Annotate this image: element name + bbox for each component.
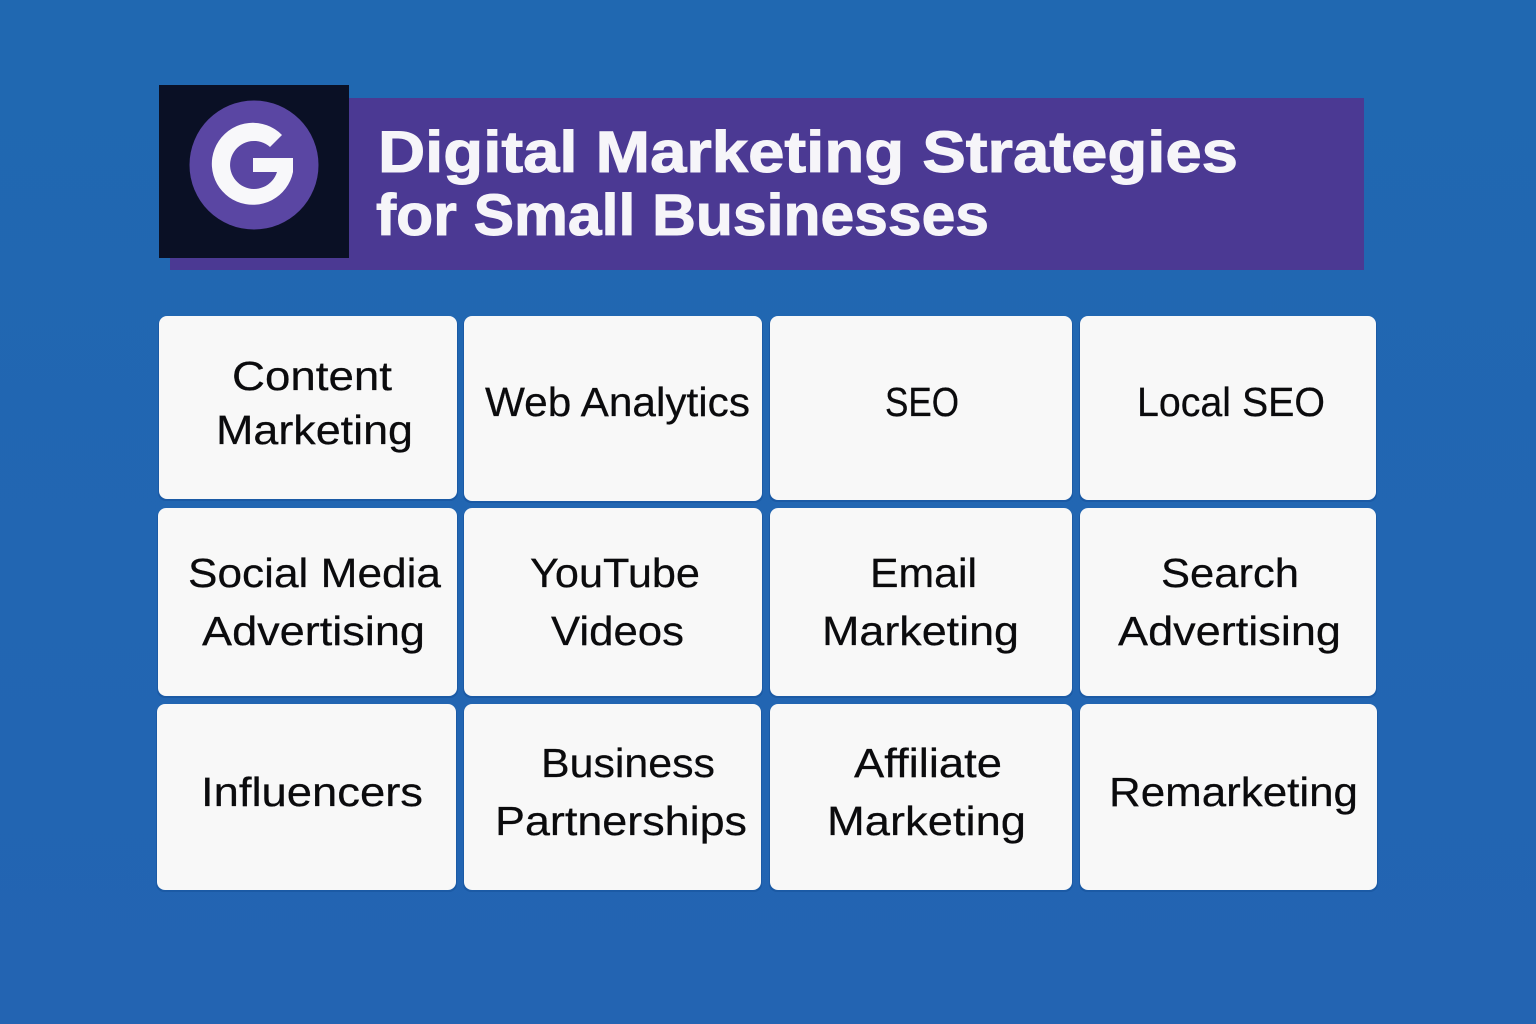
card: SEO <box>769 316 1073 502</box>
card: Influencers <box>156 704 457 892</box>
card: Search Advertising: Search <box>1161 550 1299 596</box>
card: Email Marketing: Marketing <box>822 608 1019 654</box>
card: Business Partnerships: Business <box>541 740 715 786</box>
card: YouTube Videos <box>463 508 763 698</box>
card: Local SEO <box>1079 316 1377 502</box>
icon: G logo <box>190 100 318 230</box>
card: Social Media Advertising: Advertising <box>202 608 425 654</box>
card: Business Partnerships: Partnerships <box>495 798 747 844</box>
card: Business Partnerships <box>463 704 762 892</box>
card: Remarketing <box>1079 704 1378 892</box>
card: Web Analytics <box>463 316 763 503</box>
card: Search Advertising: Advertising <box>1118 608 1341 654</box>
header banner <box>159 85 1364 270</box>
card: Social Media Advertising: Social Media <box>188 550 441 596</box>
card: Content Marketing: Content <box>232 353 393 399</box>
card: Email Marketing: Email <box>870 550 977 596</box>
card: Web Analytics: Web Analytics <box>485 379 750 425</box>
card: SEO: SEO <box>885 379 959 425</box>
card: Affiliate Marketing <box>769 704 1073 892</box>
card: Email Marketing <box>769 508 1073 698</box>
title: Digital Marketing Strategies <box>378 120 1238 185</box>
card: Affiliate Marketing: Affiliate <box>854 740 1002 786</box>
card: Search Advertising <box>1079 508 1377 698</box>
card: Affiliate Marketing: Marketing <box>827 798 1026 844</box>
card: Content Marketing <box>158 316 458 501</box>
card: Local SEO: Local SEO <box>1137 379 1325 425</box>
title: for Small Businesses <box>376 183 989 248</box>
strategy grid <box>156 316 1378 892</box>
title <box>376 120 1238 248</box>
card: Influencers: Influencers <box>201 769 423 815</box>
card: Content Marketing: Marketing <box>216 407 413 453</box>
card: Remarketing: Remarketing <box>1109 769 1358 815</box>
card: YouTube Videos: YouTube <box>530 550 700 596</box>
card: YouTube Videos: Videos <box>551 608 684 654</box>
logo panel <box>159 85 349 258</box>
card: Social Media Advertising <box>157 508 458 698</box>
banner background <box>170 98 1364 270</box>
